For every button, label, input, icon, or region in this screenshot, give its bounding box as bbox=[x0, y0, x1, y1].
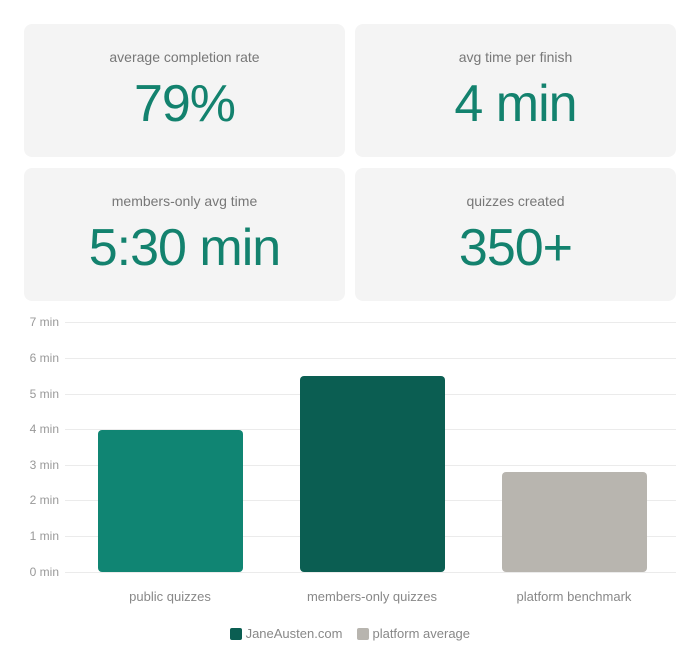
card: quizzes created: 350+ bbox=[459, 219, 572, 277]
bar: public quizzes bbox=[98, 430, 243, 572]
card: quizzes created bbox=[355, 168, 676, 301]
bar chart: 5 min bbox=[30, 387, 59, 401]
card: members-only avg time bbox=[24, 168, 345, 301]
text: public quizzes bbox=[129, 589, 211, 604]
bar: members-only quizzes bbox=[300, 376, 445, 572]
card: members-only avg time: 5:30 min bbox=[89, 219, 280, 277]
card: members-only avg time: members-only avg time bbox=[112, 193, 257, 209]
text: platform benchmark bbox=[517, 589, 631, 604]
card: avg time per finish bbox=[355, 24, 676, 157]
card: average completion rate: average completion rate bbox=[109, 49, 260, 65]
bar chart: 0 min bbox=[30, 565, 59, 579]
bar: platform benchmark bbox=[502, 472, 647, 572]
bar chart: 6 min bbox=[30, 351, 59, 365]
bar chart: 2 min bbox=[30, 493, 59, 507]
card: average completion rate: 79% bbox=[134, 75, 235, 133]
text: members-only quizzes bbox=[307, 589, 437, 604]
bar chart: 1 min bbox=[30, 529, 59, 543]
card: quizzes created: quizzes created bbox=[466, 193, 565, 209]
category labels bbox=[129, 589, 632, 604]
card: avg time per finish: 4 min bbox=[454, 75, 577, 133]
bar chart bbox=[30, 315, 676, 579]
bar chart: 7 min bbox=[30, 315, 59, 329]
legend: JaneAusten.com platform average bbox=[246, 626, 470, 641]
card: avg time per finish: avg time per finish bbox=[459, 49, 572, 65]
bar chart: 3 min bbox=[30, 458, 59, 472]
card: average completion rate bbox=[24, 24, 345, 157]
bar chart: 4 min bbox=[30, 422, 59, 436]
